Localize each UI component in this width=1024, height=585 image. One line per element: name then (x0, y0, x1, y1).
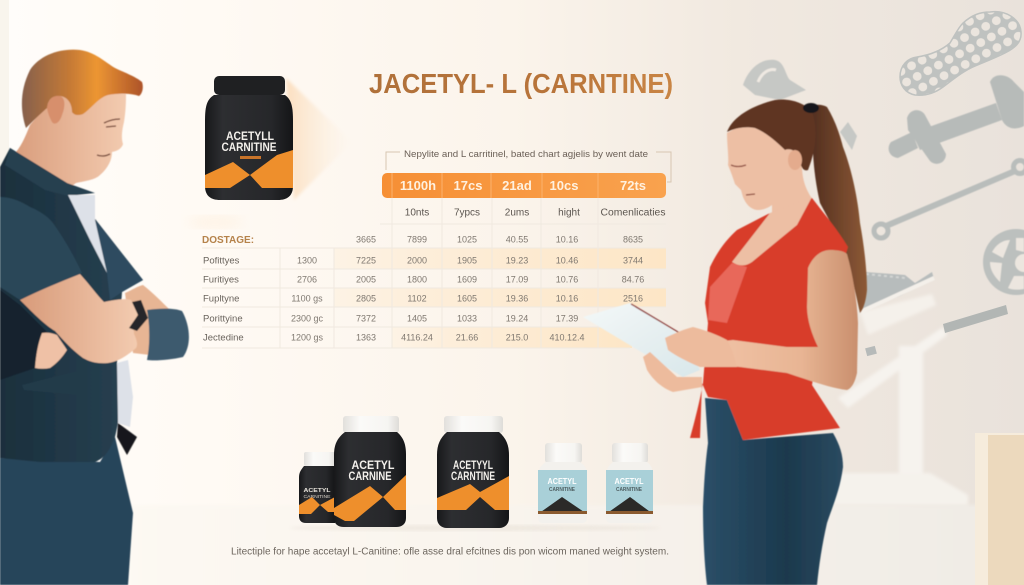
table row: dostage: 8635 (623, 234, 643, 244)
table row: fupltyne: 19.36 (506, 294, 528, 304)
table row: dostage: 10.16 (556, 234, 578, 244)
table row: dostage: DOSTAGE: (202, 235, 254, 246)
table sub-header row: 2ums (505, 208, 529, 218)
product bottle: large black left (334, 416, 406, 527)
table row: furitiyes: 2706 (297, 274, 317, 284)
man fingers (35, 333, 67, 369)
woman chest (732, 197, 812, 265)
table row: fupltyne: 1102 (407, 294, 427, 304)
table row: jectedine: 4116.24 (401, 332, 433, 342)
man belt (117, 423, 137, 455)
man jacket sleeve (0, 197, 82, 300)
bottom caption: Litectiple for hape accetayl L-Canitine: ofle asse dral efcitnes dis pon wicom maned weight system. (231, 546, 669, 558)
table row: furitiyes: 1609 (457, 274, 477, 284)
table row: porittyine (203, 314, 578, 324)
table row: furitiyes: 17.09 (506, 274, 528, 284)
icon: wall sneaker (858, 272, 934, 312)
table sub-header row: 7ypcs (454, 208, 480, 218)
woman red top (690, 198, 848, 440)
product bottle: blue left (538, 443, 587, 523)
table row: furitiyes: 1800 (407, 274, 427, 284)
table row: jectedine: 1200 gs (291, 332, 324, 342)
table row: porittyine: 7372 (356, 314, 376, 324)
man collar (5, 148, 95, 196)
tablet (583, 303, 700, 377)
table caption with bracket: Nepylite and L carritinel, bated chart agjelis by went date (404, 149, 648, 160)
table header bar: 17cs (454, 178, 482, 193)
table sub-header row: 10nts (405, 208, 429, 218)
product bottle: large black left: ACETYL (352, 460, 394, 472)
table row: fupltyne (203, 294, 643, 304)
table row: pofittyes: Pofittyes (203, 256, 240, 266)
product bottle: small black (299, 452, 335, 523)
table row: porittyine: 2300 gc (291, 314, 324, 324)
table row: furitiyes: 84.76 (622, 274, 644, 284)
woman hands (643, 327, 737, 392)
woman hair tie (803, 103, 819, 113)
man shirt (68, 195, 133, 427)
table row: pofittyes: 1300 (297, 256, 317, 266)
table row: dostage: 1025 (457, 234, 477, 244)
man wristwatch (129, 300, 148, 331)
product bottle: small black: CARNITINE (304, 494, 330, 499)
table row: fupltyne: Fupltyne (203, 294, 239, 304)
table sub-header row: Comenlicaties (600, 208, 666, 218)
table row: pofittyes: 2000 (407, 256, 427, 266)
table row: furitiyes (203, 274, 644, 286)
icon: wall shape behind woman (743, 60, 857, 150)
table row bands (334, 248, 666, 348)
table row: jectedine (203, 332, 585, 344)
man neck and face (8, 90, 126, 195)
product bottle: small black: ACETYL (304, 488, 331, 494)
woman inner top (708, 263, 747, 323)
woman facial features (731, 165, 755, 195)
product bottle: top (205, 76, 293, 200)
table row: fupltyne: 2805 (356, 294, 376, 304)
icon: wall shoe sole (900, 12, 1021, 95)
table row: pofittyes: 3744 (623, 256, 643, 266)
woman arm (715, 250, 858, 390)
table row: jectedine: Jectedine (203, 332, 244, 344)
icon: wall gear (983, 229, 1024, 295)
woman neck and face (727, 115, 813, 262)
man jacket (0, 148, 143, 462)
product bottle: large black right: CARNTINE (451, 471, 495, 483)
man trousers (0, 437, 133, 585)
table row: porittyine: 1033 (457, 314, 477, 324)
table header bar (382, 173, 666, 198)
table row: jectedine: 410.12.4 (549, 332, 585, 342)
product bottle: blue right: CARNITINE (616, 487, 643, 493)
table header bar: 72ts (620, 178, 646, 193)
table caption with bracket (386, 149, 671, 182)
table row: jectedine: 1363 (356, 332, 376, 342)
title: JACETYL- L (CARNTINE) (369, 68, 673, 99)
product bottle: large black right (437, 416, 509, 528)
product bottle: large black right: ACETYYL (453, 460, 493, 472)
wooden box (975, 433, 1024, 585)
white exercise bench (827, 294, 968, 505)
table grid lines (202, 198, 666, 348)
woman reading tablet (583, 100, 867, 585)
table row: dostage: 7899 (407, 234, 427, 244)
table sub-header row (405, 208, 666, 218)
table row: dostage: 40.55 (506, 234, 528, 244)
table header bar: 21ad (502, 178, 532, 193)
bottle label: ACETYLL (226, 131, 274, 143)
man cuff (147, 309, 189, 360)
table row: dostage: 3665 (356, 234, 376, 244)
table row: pofittyes (203, 256, 643, 266)
table header bar: 10cs (550, 178, 578, 193)
table row: porittyine: 17.39 (556, 314, 578, 324)
table row: pofittyes: 10.46 (556, 256, 578, 266)
table row: porittyine: Porittyine (203, 314, 243, 324)
man ear (47, 96, 64, 124)
bottle shadows on floor (290, 525, 660, 531)
woman jeans (703, 398, 843, 585)
table row: porittyine: 19.24 (506, 314, 528, 324)
man jacket pocket and button (22, 370, 82, 395)
man hair (22, 50, 143, 128)
man with crossed arms (0, 50, 189, 585)
table row: fupltyne: 2516 (623, 294, 643, 304)
man facial features (97, 119, 120, 156)
table row: pofittyes: 7225 (356, 256, 376, 266)
man upper arm and hand (20, 274, 138, 363)
table sub-header row: hight (558, 208, 580, 218)
table row: furitiyes: Furitiyes (203, 274, 239, 286)
table row: fupltyne: 1100 gs (291, 294, 323, 304)
man far forearm (125, 285, 170, 355)
table row: fupltyne: 10.16 (556, 294, 578, 304)
table row: pofittyes: 19.23 (506, 256, 528, 266)
icon: wall wrench (874, 160, 1024, 238)
product bottle: blue left: ACETYL (548, 477, 577, 486)
peach light beam behind bottle (286, 78, 352, 200)
woman ear (788, 150, 802, 170)
dosage table (202, 173, 666, 348)
table row: furitiyes: 10.76 (556, 274, 578, 284)
product bottle: blue left: CARNITINE (549, 487, 576, 493)
table row: furitiyes: 2005 (356, 274, 376, 284)
product bottle: blue right (606, 443, 653, 523)
table row: jectedine: 21.66 (456, 332, 478, 342)
woman hair (727, 100, 815, 170)
table row: pofittyes: 1905 (457, 256, 477, 266)
table row: porittyine: 1405 (407, 314, 427, 324)
woman ponytail (807, 105, 867, 313)
table row: jectedine: 215.0 (506, 332, 528, 342)
icon: wall dumbbell (889, 75, 1024, 164)
bench bar and knob (865, 305, 1008, 356)
table row: fupltyne: 1605 (457, 294, 477, 304)
product bottle: large black left: CARNINE (348, 471, 392, 483)
product bottle: blue right: ACETYL (614, 477, 644, 486)
table header bar: 1100h (400, 178, 436, 193)
man dark underarm (0, 290, 50, 380)
table row: dostage (202, 234, 643, 246)
product bottle: top: CARNITINE (222, 142, 277, 154)
man lapel (95, 220, 143, 300)
